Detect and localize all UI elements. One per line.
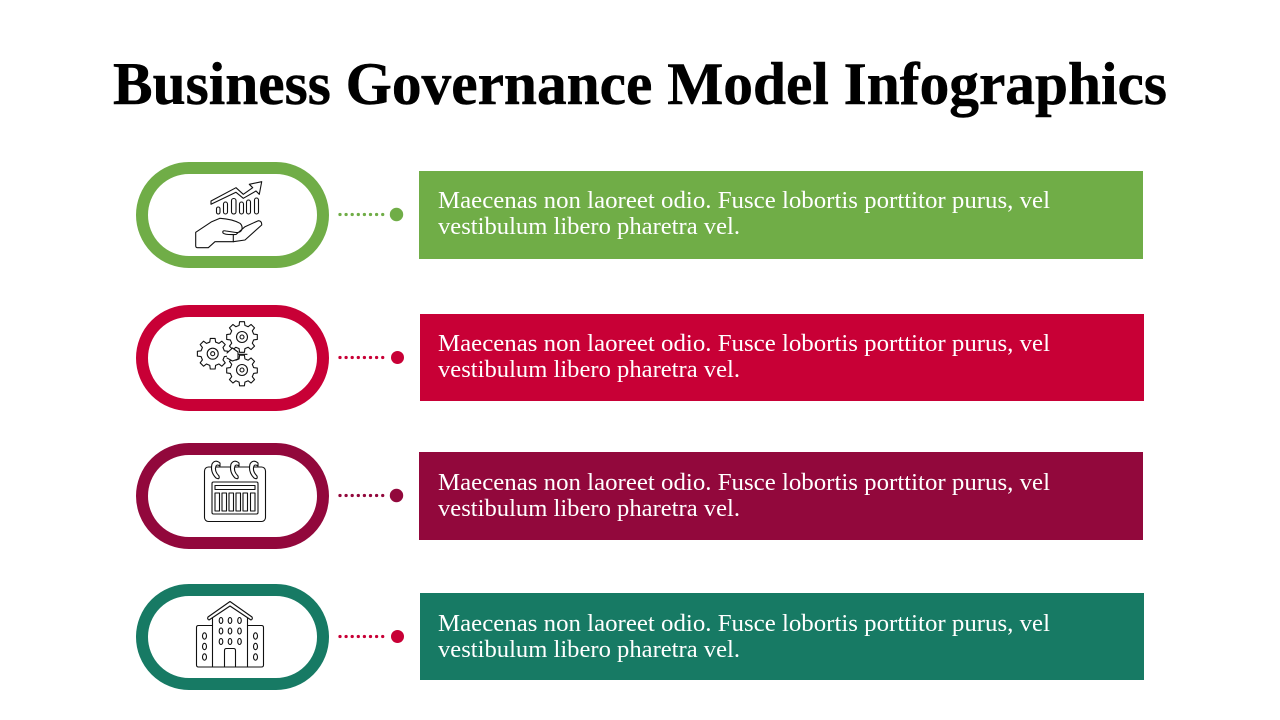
node: red [391,630,404,643]
connector: maroon dots [340,494,388,497]
pill: maroon [142,449,323,543]
text box: maroon [419,452,1143,540]
pill: green [142,168,323,262]
connector: red dots [340,635,388,638]
row 1: growth [142,168,1143,262]
icon: hand with growth chart [196,182,262,248]
title: Business Governance Model Infographics [113,51,1167,117]
connector: red dots [340,356,388,359]
text box: red [420,314,1144,401]
text: green box: Maecenas non laoreet odio. Fusce lobortis porttitor purus, vel [438,188,1050,214]
text: maroon box: vestibulum libero pharetra vel. [438,496,740,522]
text box: green [419,171,1143,259]
row 2: gears [142,311,1144,405]
text: maroon box: Maecenas non laoreet odio. Fusce lobortis porttitor purus, vel [438,470,1050,496]
text: green box: vestibulum libero pharetra vel. [438,214,740,240]
icon: calendar [204,461,266,522]
node: green [390,208,403,221]
icon: three gears [197,322,257,386]
connector: green dots [340,213,388,216]
pill: red [142,311,323,405]
text: teal box: vestibulum libero pharetra vel. [438,637,740,663]
text: red box: vestibulum libero pharetra vel. [438,357,740,383]
icon: building [196,602,264,667]
row 3: calendar [142,449,1143,543]
node: red [391,351,404,364]
row 4: building [142,590,1144,684]
node: maroon [390,489,403,502]
pill: teal [142,590,323,684]
text box: teal [420,593,1144,680]
text: red box: Maecenas non laoreet odio. Fusce lobortis porttitor purus, vel [438,331,1050,357]
text: teal box: Maecenas non laoreet odio. Fusce lobortis porttitor purus, vel [438,611,1050,637]
